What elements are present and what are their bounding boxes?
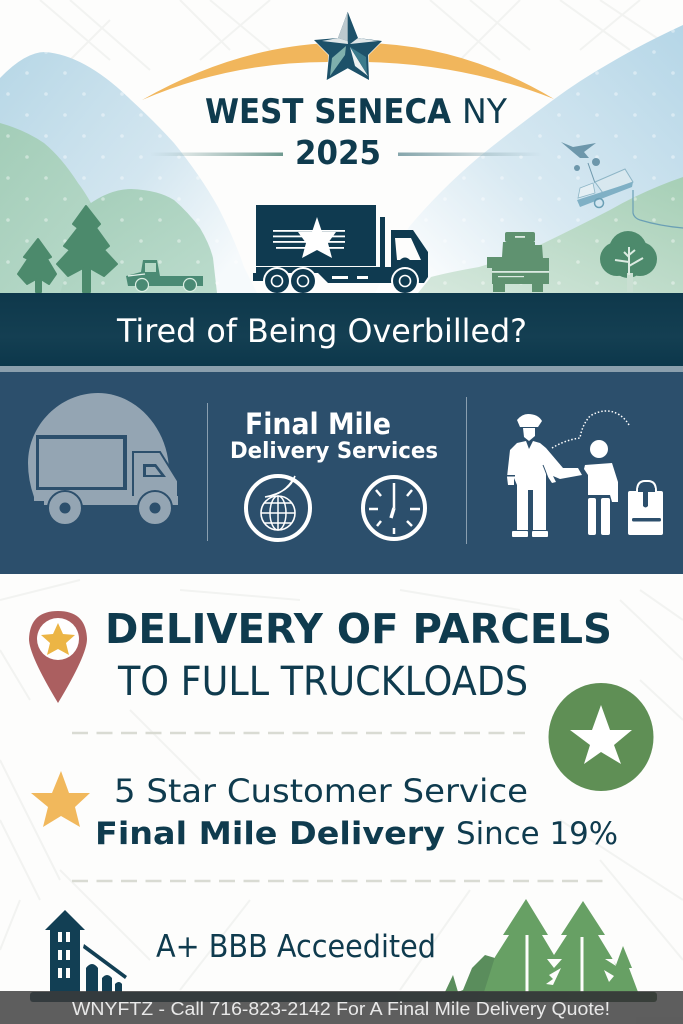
delivery heading: TO FULL TRUCKLOADS [117, 659, 528, 705]
delivery heading: DELIVERY OF PARCELS [105, 605, 612, 653]
icon: driver handing parcel to customer [507, 411, 663, 537]
ground bar [30, 992, 657, 1002]
icon: forest [445, 899, 638, 992]
accreditation text: A+ BBB Acceedited [156, 929, 436, 965]
services panel [0, 366, 683, 574]
headline band [0, 293, 683, 366]
customer service text: Final Mile Delivery [95, 816, 445, 852]
icon: round tree [600, 231, 657, 292]
footer caption bar [0, 991, 683, 1024]
icon: green star badge [548, 683, 654, 791]
year with rules [150, 133, 542, 172]
icon: clock [363, 477, 425, 539]
star emblem [314, 12, 382, 80]
title: WEST SENECA [205, 92, 452, 132]
delivery heading [105, 605, 612, 705]
icon: pickup truck [126, 260, 203, 292]
orange arc [142, 43, 554, 100]
icon: pine trees [18, 206, 117, 292]
icon: rear-view vehicle [487, 232, 549, 292]
title: NY [462, 92, 507, 132]
customer service text [95, 772, 618, 852]
right blue hill [375, 25, 683, 293]
hero landscape [0, 25, 683, 293]
year with rules: 2025 [295, 133, 381, 172]
left blue hill [0, 52, 257, 293]
left back green hill [0, 123, 140, 293]
icon: building [45, 910, 127, 992]
icon: gold star [31, 771, 90, 827]
icon: plane and airlifted truck [561, 142, 683, 228]
icon: location pin [29, 611, 87, 703]
service heading: Delivery Services [230, 439, 438, 464]
hill dot texture [0, 25, 683, 293]
headline band: Tired of Being Overbilled? [116, 312, 527, 350]
icon: delivery truck [253, 205, 428, 295]
footer caption bar: WNYFTZ - Call 716-823-2142 For A Final Mile Delivery Quote! [72, 999, 610, 1019]
service heading [230, 407, 438, 464]
service heading: Final Mile [245, 407, 391, 441]
customer service text: Since 19% [456, 816, 618, 852]
customer service text: 5 Star Customer Service [114, 772, 528, 810]
right green hill [418, 177, 683, 293]
icon: globe [246, 476, 310, 540]
icon: gray truck on dome [28, 393, 178, 525]
left front green hill [60, 189, 217, 293]
